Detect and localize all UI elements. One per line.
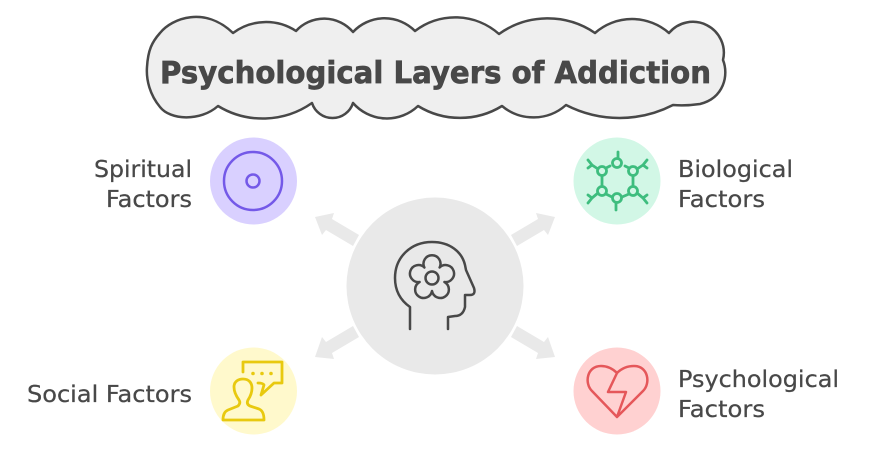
biological factors label — [678, 157, 793, 213]
spiritual factors label — [94, 157, 192, 213]
icon: head with flower — [395, 242, 474, 329]
central circle with head icon — [346, 198, 524, 374]
spiritual factors label: Factors — [106, 187, 192, 213]
spiritual factors label: Spiritual — [94, 157, 192, 183]
arrow: to psychological factors — [511, 326, 555, 359]
icon: molecule — [588, 152, 647, 210]
biological factors label: Biological — [678, 157, 793, 183]
biological factors label: Factors — [678, 187, 765, 213]
psychological factors label: Psychological — [678, 367, 839, 393]
icon: broken heart — [588, 366, 647, 417]
social factors label: Social Factors — [27, 382, 192, 408]
biological factors node — [574, 138, 660, 224]
arrow: to social factors — [315, 326, 359, 359]
icon: concentric circles — [224, 152, 282, 210]
arrow: to biological factors — [511, 213, 555, 246]
title cloud — [147, 17, 725, 119]
psychological factors node — [574, 348, 660, 434]
bubble dots — [251, 372, 273, 375]
social factors node — [210, 348, 297, 434]
icon: person with speech bubble — [223, 362, 282, 420]
arrow: to spiritual factors — [315, 213, 359, 246]
spiritual factors node — [210, 138, 297, 224]
psychological factors label — [678, 367, 839, 423]
title text: Psychological Layers of Addiction — [160, 56, 711, 91]
psychological factors label: Factors — [678, 397, 765, 423]
